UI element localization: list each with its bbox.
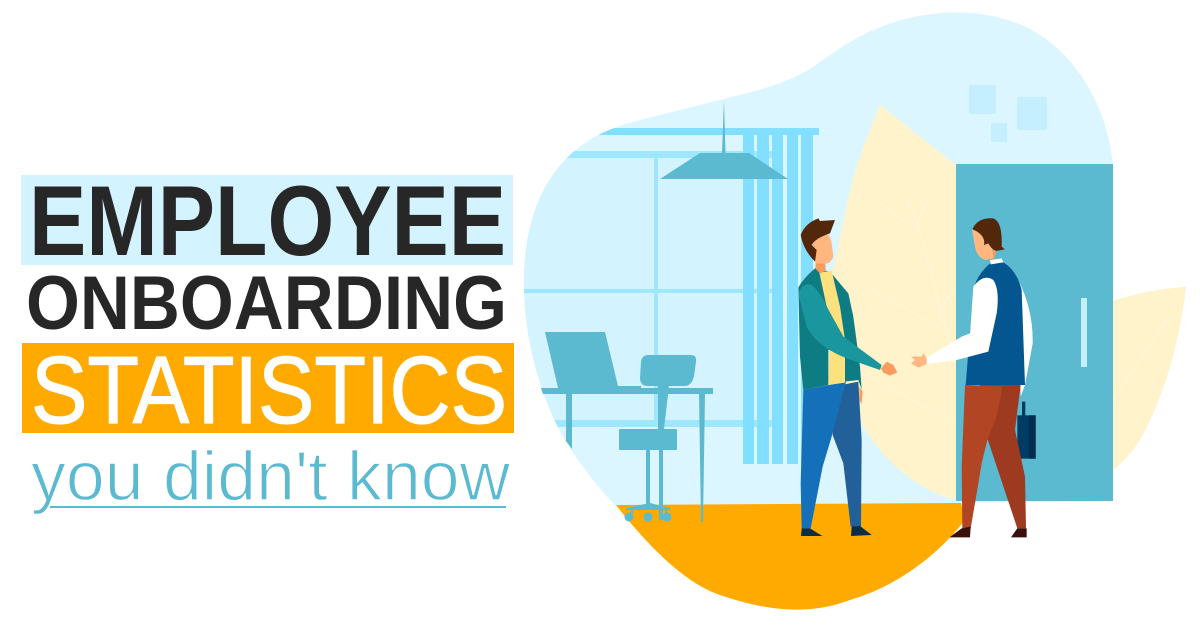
yellow leaves [831, 105, 1186, 501]
illustration: office handshake scene [520, 12, 1186, 610]
office chair [619, 355, 696, 522]
heading: statistics: STATISTICS [31, 337, 507, 444]
heading: employee: EMPLOYEE [29, 165, 506, 276]
person: man in blue vest with briefcase [911, 218, 1036, 537]
title block [21, 165, 514, 515]
person: man in teal jacket [798, 218, 897, 536]
window and curtains [520, 128, 819, 464]
door [956, 164, 1113, 501]
desk with laptop [541, 332, 713, 522]
heading: onboarding: ONBOARDING [26, 261, 507, 346]
subheading: you didn't know: you didn't know [31, 437, 510, 515]
background blob [524, 12, 1113, 506]
icon: hanging lamp [660, 100, 788, 179]
wall squares [969, 85, 1047, 142]
orange floor [616, 503, 965, 610]
